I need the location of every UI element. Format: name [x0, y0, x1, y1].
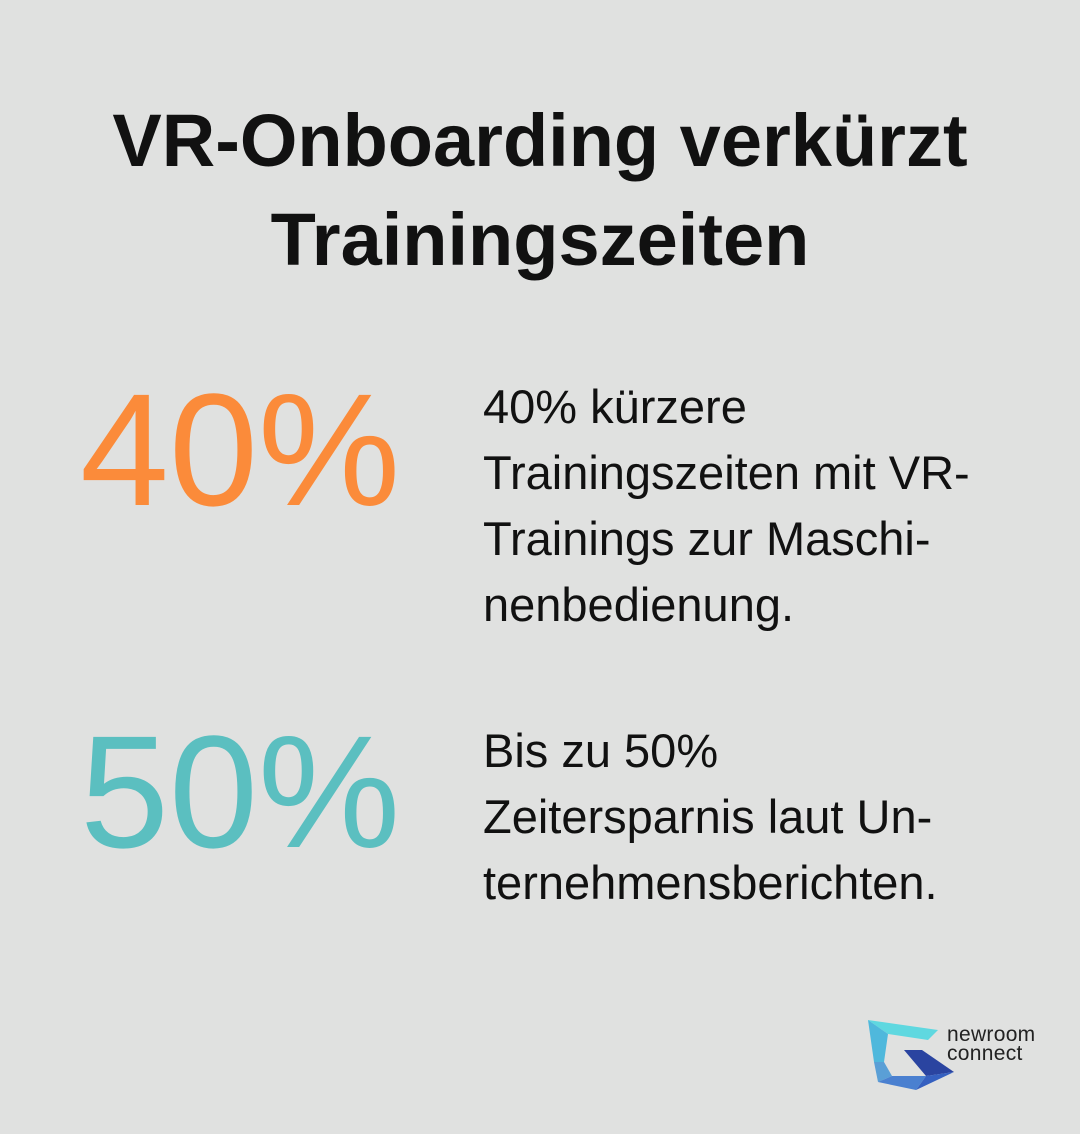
stat 50% text: ternehmensberichten. [483, 856, 938, 909]
stat 40% text: Trainingszeiten mit VR- [483, 446, 970, 499]
stat 40% text: Trainings zur Maschi- [483, 512, 930, 565]
logo: newroom [947, 1023, 1035, 1046]
logo: connect [947, 1042, 1023, 1065]
title: Trainingszeiten [271, 198, 809, 281]
stat 50% text: Zeitersparnis laut Un- [483, 790, 932, 843]
stat 40% text: nenbedienung. [483, 578, 794, 631]
stat 50% number: 50% [80, 702, 400, 881]
title [112, 99, 968, 281]
title: VR-Onboarding verkürzt [112, 99, 968, 182]
stat 40% number: 40% [80, 360, 400, 539]
logo [868, 1020, 1035, 1090]
stat 40% text: 40% kürzere [483, 380, 747, 433]
stat 40% text [483, 380, 970, 631]
stat 50% text: Bis zu 50% [483, 724, 718, 777]
stat 50% text [483, 724, 938, 909]
